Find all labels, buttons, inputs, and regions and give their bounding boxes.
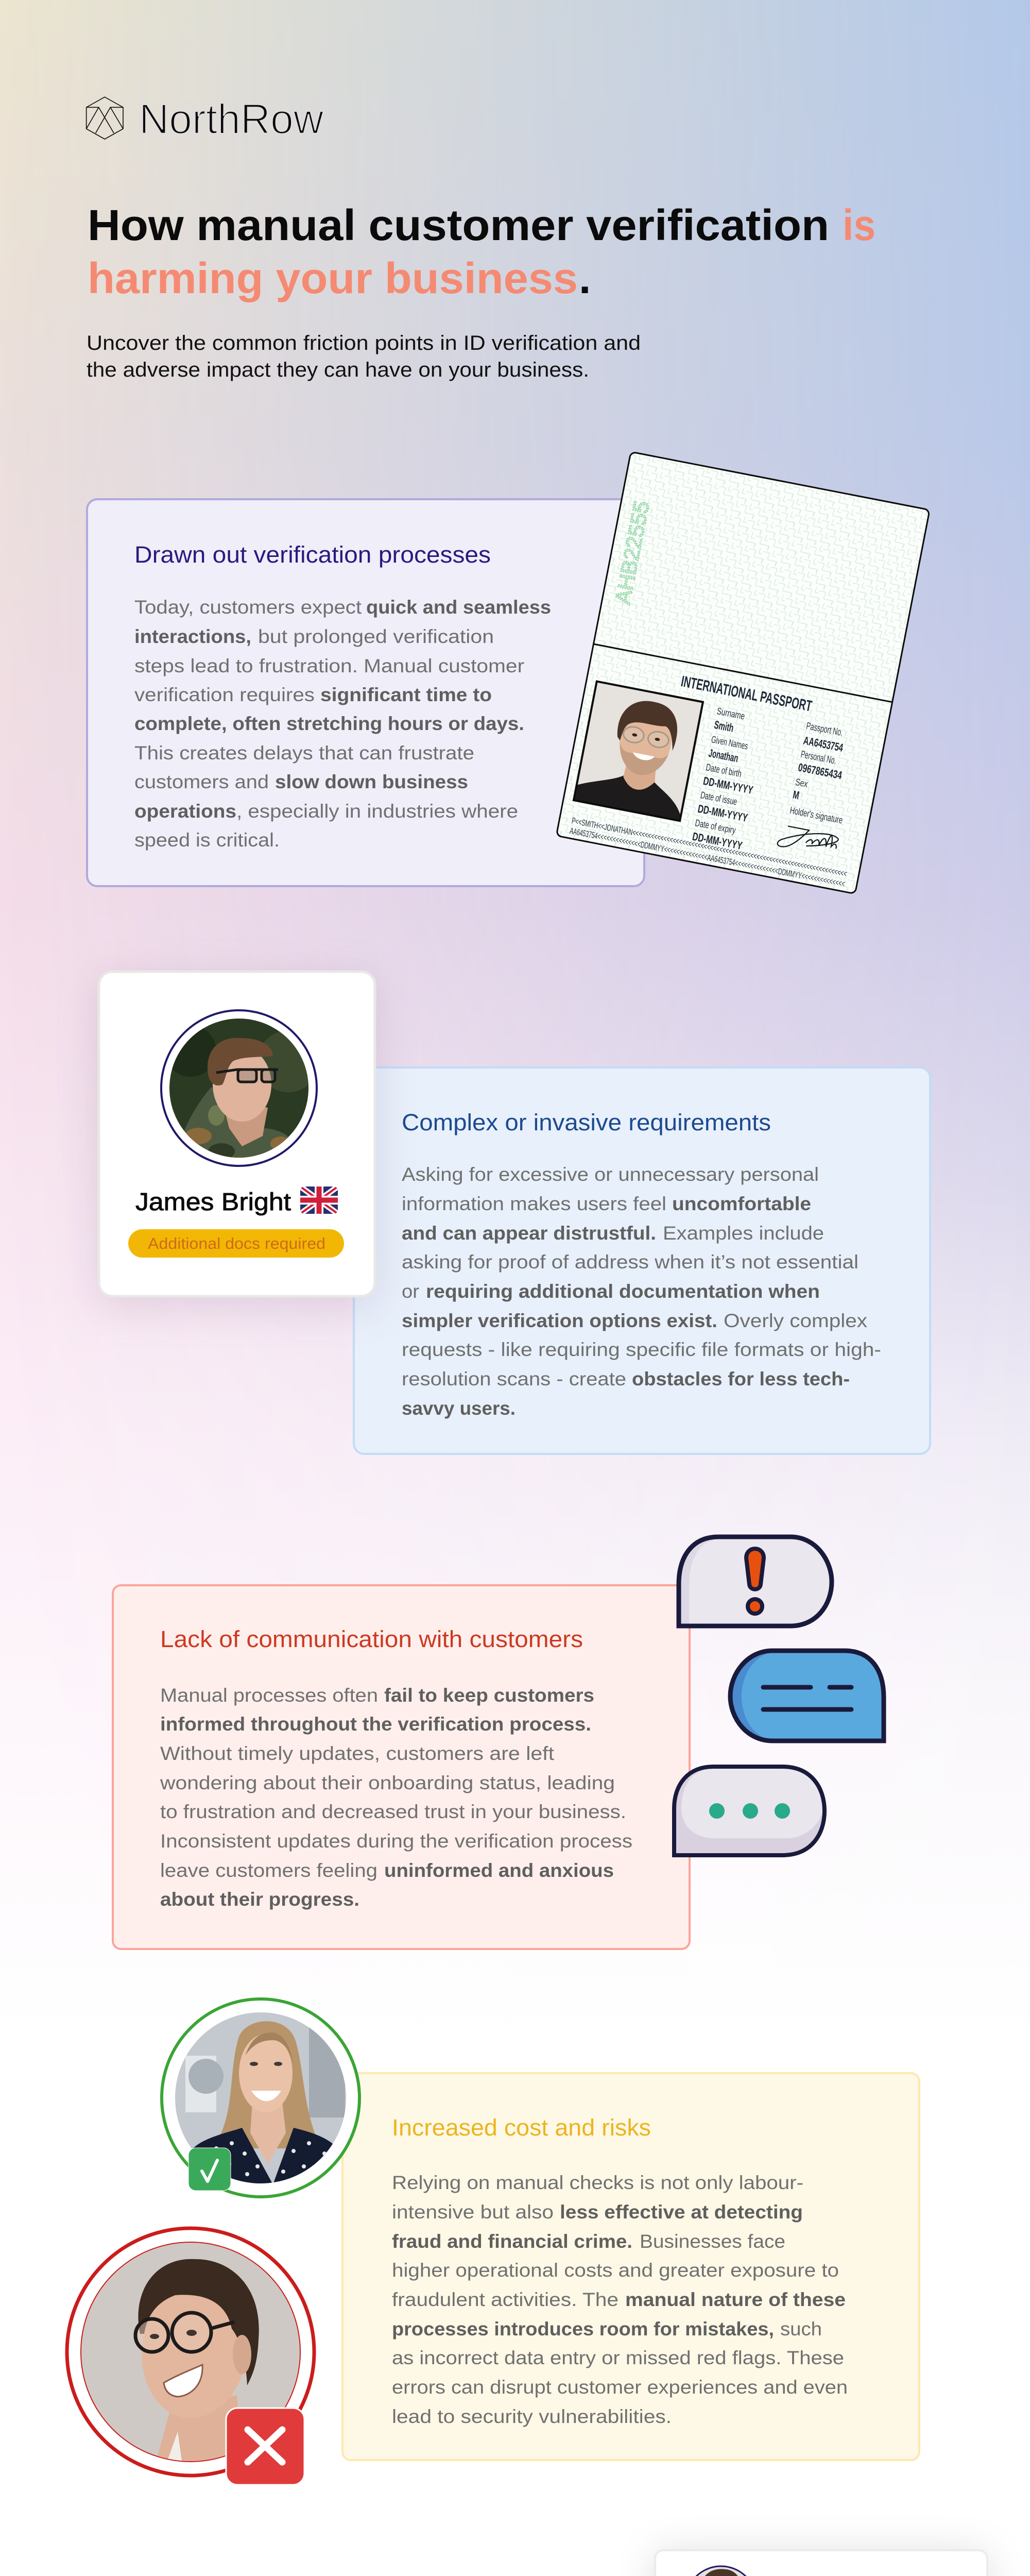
body text: obstacles for less tech- xyxy=(632,1368,850,1389)
body text: uncomfortable xyxy=(672,1193,811,1214)
background gradient xyxy=(0,0,1030,1773)
title xyxy=(88,201,876,302)
passport fields: left column: Given Names xyxy=(710,734,749,752)
heading: Increased cost and risks xyxy=(392,2114,651,2141)
body text: Asking for excessive or unnecessary personal xyxy=(402,1164,819,1185)
body text: steps lead to frustration. Manual customer xyxy=(134,655,524,676)
title: harming your business xyxy=(88,254,578,302)
body text: and can appear distrustful. xyxy=(402,1223,656,1244)
passport machine readable zone xyxy=(569,816,848,889)
passport fields: right column: AA6453754 xyxy=(802,734,845,754)
body text: slow down business xyxy=(275,771,468,792)
passport fields: right column: M xyxy=(792,788,800,802)
passport photo xyxy=(574,682,703,821)
body text: requests - like requiring specific file formats or high- xyxy=(402,1339,881,1360)
passport fields: left column: Date of expiry xyxy=(694,818,737,836)
passport fields: left column: Jonathan xyxy=(708,747,740,765)
icon: typing speech bubble xyxy=(674,1767,825,1855)
body text: verification requires xyxy=(134,684,315,705)
passport fields: left column xyxy=(691,706,767,852)
body text: quick and seamless xyxy=(366,597,551,618)
panel: complex or invasive requirements xyxy=(354,1067,930,1454)
body text: Today, customers expect xyxy=(134,597,362,618)
passport machine readable zone: AA6453754<<<<<<<<<<<<<<DDMMYY<<<<<<<<<<<<<<AA6453754<<<<<<<<<<<<<<DDMMYY<<<<<<<<<<<<<< xyxy=(569,826,846,889)
body text: , especially in industries where xyxy=(236,801,518,822)
body text: significant time to xyxy=(320,684,492,705)
title: How manual customer verification xyxy=(88,201,829,249)
passport fields: left column: DD-MM-YYYY xyxy=(697,802,749,824)
passport fields: right column xyxy=(789,721,860,826)
body text: intensive but also xyxy=(392,2201,554,2223)
body text: lead to security vulnerabilities. xyxy=(392,2406,672,2427)
flag: United Kingdom xyxy=(300,1187,338,1214)
icon: rejected cross badge xyxy=(226,2408,304,2485)
body text: fail to keep customers xyxy=(384,1685,594,1706)
passport fields: left column: Date of issue xyxy=(699,790,738,808)
body text: uninformed and anxious xyxy=(384,1860,614,1881)
logo wordmark: NorthRow xyxy=(139,96,324,143)
avatar xyxy=(680,2563,757,2576)
heading: Lack of communication with customers xyxy=(160,1626,583,1652)
passport fold line xyxy=(593,644,892,702)
name: James Bright xyxy=(135,1189,291,1216)
body text: simpler verification options exist. xyxy=(402,1310,717,1331)
body text xyxy=(402,1164,881,1419)
body text: higher operational costs and greater exposure to xyxy=(392,2260,839,2281)
body text: Businesses face xyxy=(640,2231,785,2252)
passport fields: left column: Date of birth xyxy=(705,762,743,779)
passport serial number: AHB22555 xyxy=(610,499,654,606)
icon: message speech bubble xyxy=(730,1651,884,1741)
subtitle xyxy=(87,332,641,381)
passport fields: right column: Holder's signature xyxy=(789,805,844,826)
body text: Examples include xyxy=(663,1223,824,1244)
title: is xyxy=(843,201,876,249)
body text: Relying on manual checks is not only labour- xyxy=(392,2172,803,2193)
body text: to frustration and decreased trust in your business. xyxy=(160,1801,626,1822)
body text: interactions, xyxy=(134,626,251,647)
body text: requiring additional documentation when xyxy=(426,1281,820,1302)
passport fields: left column: DD-MM-YYYY xyxy=(702,774,754,796)
body text: information makes users feel xyxy=(402,1193,666,1214)
avatar: verified woman xyxy=(162,1999,359,2197)
body text: fraud and financial crime. xyxy=(392,2231,632,2252)
status badge xyxy=(128,1229,344,1258)
NorthRow logo header xyxy=(87,96,324,143)
body text: wondering about their onboarding status, leading xyxy=(160,1772,615,1793)
profile card: James Bright xyxy=(99,972,375,1296)
avatar ring xyxy=(161,1010,317,1166)
body text: processes introduces room for mistakes, xyxy=(392,2318,774,2340)
passport fields: right column: Personal No. xyxy=(800,749,837,767)
passport fields: left column: Smith xyxy=(713,718,735,735)
body text: customers and xyxy=(134,771,269,792)
body text: informed throughout the verification process. xyxy=(160,1714,591,1735)
passport page xyxy=(556,452,930,894)
body text: Inconsistent updates during the verification process xyxy=(160,1831,632,1852)
passport fields: left column: Surname xyxy=(716,706,746,722)
body text: as incorrect data entry or missed red flags. These xyxy=(392,2347,844,2368)
panel: drawn out verification processes xyxy=(87,499,644,886)
profile card: Aleksandr Tamm xyxy=(655,2550,987,2576)
body text: Without timely updates, customers are left xyxy=(160,1743,555,1764)
photo: woman xyxy=(175,2012,346,2184)
body text: less effective at detecting xyxy=(560,2201,803,2223)
passport fields: right column: Passport No. xyxy=(805,721,844,738)
avatar: rejected man xyxy=(67,2228,314,2485)
body text: leave customers feeling xyxy=(160,1860,377,1881)
icon: alert speech bubble xyxy=(679,1537,832,1626)
body text: savvy users. xyxy=(402,1398,516,1419)
title: . xyxy=(579,254,591,302)
body text: such xyxy=(780,2318,822,2340)
body text xyxy=(134,597,551,851)
subtitle: the adverse impact they can have on your business. xyxy=(87,359,589,381)
body text: Manual processes often xyxy=(160,1685,378,1706)
body text: operations xyxy=(134,801,236,822)
icon: verified check badge xyxy=(188,2148,231,2191)
body text: Overly complex xyxy=(724,1310,868,1331)
status badge: Additional docs required xyxy=(148,1234,325,1252)
passport fields: right column: Sex xyxy=(795,777,809,790)
body text xyxy=(160,1685,632,1910)
body text: manual nature of these xyxy=(625,2289,846,2310)
body text: speed is critical. xyxy=(134,829,280,851)
avatar photo: James xyxy=(169,1019,308,1158)
body text: about their progress. xyxy=(160,1889,359,1910)
passport fields: left column: DD-MM-YYYY xyxy=(691,830,744,852)
subtitle: Uncover the common friction points in ID verification and xyxy=(87,332,641,354)
body text: complete, often stretching hours or days. xyxy=(134,713,524,734)
panel: increased cost and risks xyxy=(342,2073,919,2460)
passport illustration xyxy=(556,452,930,894)
body text: asking for proof of address when it’s not essential xyxy=(402,1251,859,1273)
panel: lack of communication with customers xyxy=(113,1585,690,1949)
heading: Complex or invasive requirements xyxy=(402,1109,771,1136)
photo: man xyxy=(81,2243,300,2468)
passport machine readable zone: P<<SMITH<<JONATHAN<<<<<<<<<<<<<<<<<<<<<<<<<<<<<<<<<<<<<<<<<<<<<<<<<<<<<<<<<<<<<<<<<<<<< xyxy=(571,816,848,879)
passport title: INTERNATIONAL PASSPORT xyxy=(680,673,813,715)
passport signature xyxy=(777,825,839,857)
body text: but prolonged verification xyxy=(258,626,494,647)
body text: fraudulent activities. The xyxy=(392,2289,619,2310)
body text: resolution scans - create xyxy=(402,1368,626,1389)
body text: or xyxy=(402,1281,419,1302)
body text xyxy=(392,2172,848,2427)
body text: errors can disrupt customer experiences and even xyxy=(392,2377,848,2398)
passport fields: right column: 0967865434 xyxy=(797,761,844,782)
heading: Drawn out verification processes xyxy=(134,541,491,568)
icon: NorthRow mark xyxy=(87,97,123,139)
body text: This creates delays that can frustrate xyxy=(134,742,474,764)
